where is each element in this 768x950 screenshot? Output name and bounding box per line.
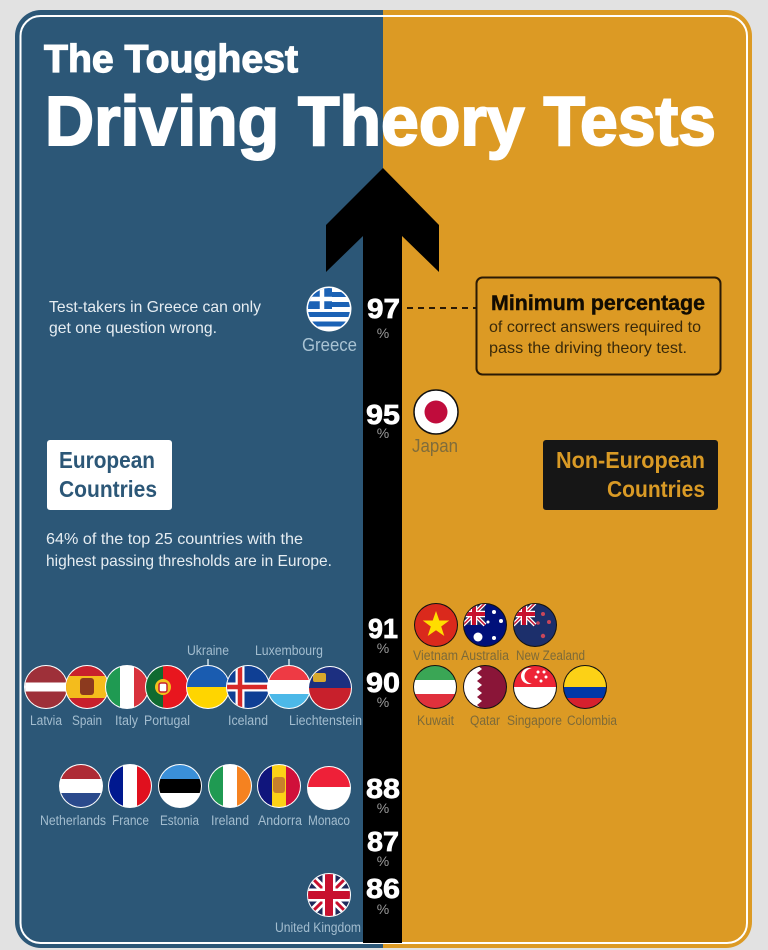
- flag: Australia: [463, 603, 507, 647]
- labels: 88 percent countries: Netherlands: [40, 813, 106, 828]
- labels: 90 percent non-European countries: Qatar: [470, 713, 500, 728]
- flag: France: [108, 764, 152, 808]
- labels: 90 percent European countries: Italy: [115, 713, 138, 728]
- flag: Ukraine: [186, 665, 230, 709]
- labels: 88 percent countries: France: [112, 813, 149, 828]
- flag: Netherlands: [59, 764, 103, 808]
- flag: New Zealand: [513, 603, 557, 647]
- labels: 88 percent countries: Estonia: [160, 813, 199, 828]
- callout: minimum percentage: [407, 278, 720, 374]
- flag: Japan: [414, 390, 458, 434]
- flag: Luxembourg: [267, 665, 311, 709]
- percentage scale: 88: [366, 773, 400, 804]
- callout: minimum percentage: of correct answers required to: [489, 319, 701, 336]
- labels: 90 percent non-European countries: Colombia: [567, 713, 617, 728]
- badge: European Countries: Countries: [59, 476, 157, 502]
- flag: Qatar: [463, 665, 507, 709]
- text: Europe share: [46, 531, 332, 570]
- percentage scale: 95: [366, 399, 400, 430]
- flag: Latvia: [24, 665, 68, 709]
- labels: 90 percent European countries: Ukraine: [187, 643, 229, 658]
- flag: Kuwait: [413, 665, 457, 709]
- text: Greece note: [49, 299, 261, 337]
- title: [44, 38, 716, 160]
- badge: European Countries: European: [59, 447, 155, 473]
- text: Europe share: 64% of the top 25 countries with the: [46, 531, 303, 548]
- title: The Toughest: [44, 38, 298, 81]
- labels: 88 percent countries: Andorra: [258, 813, 302, 828]
- percentage scale: 87: [367, 826, 399, 857]
- flag: Andorra: [257, 764, 301, 808]
- labels: 90 percent European countries: Liechtenstein: [289, 713, 362, 728]
- badge: Non-European Countries: [543, 440, 718, 510]
- percentage scale: %: [377, 425, 389, 441]
- labels: 90 percent European countries: Portugal: [144, 713, 190, 728]
- labels: 90 percent non-European countries: Singapore: [507, 713, 562, 728]
- labels: 88 percent countries: Monaco: [308, 813, 350, 828]
- title: Driving Theory Tests: [45, 82, 716, 160]
- labels: 91 percent countries: [413, 648, 585, 663]
- flag: Liechtenstein: [308, 666, 352, 710]
- labels: 90 percent European countries: Iceland: [228, 713, 268, 728]
- flag: Singapore: [513, 665, 557, 709]
- percentage scale: %: [377, 694, 389, 710]
- percentage scale: 90: [366, 667, 400, 698]
- arrow: [326, 168, 439, 943]
- flag: Spain: [65, 665, 109, 709]
- labels: 88 percent countries: Ireland: [211, 813, 249, 828]
- label: United Kingdom: United Kingdom: [275, 920, 361, 935]
- callout: minimum percentage: Minimum percentage: [491, 292, 705, 315]
- labels: 91 percent countries: Australia: [461, 648, 509, 663]
- flag: Colombia: [563, 665, 607, 709]
- flag: Ireland: [208, 764, 252, 808]
- text: Greece note: get one question wrong.: [49, 320, 217, 337]
- badge: Non-European Countries: Countries: [607, 476, 705, 502]
- labels: 90 percent European countries: Latvia: [30, 713, 62, 728]
- labels: 91 percent countries: Vietnam: [413, 648, 458, 663]
- percentage scale: 97: [367, 293, 400, 324]
- labels: 90 percent non-European countries: Kuwait: [417, 713, 454, 728]
- flag: Iceland: [226, 665, 270, 709]
- percentage scale: 91: [368, 613, 398, 644]
- labels: 88 percent countries: [40, 813, 350, 828]
- callout: minimum percentage: pass the driving theory test.: [489, 340, 687, 357]
- text: Europe share: highest passing thresholds are in Europe.: [46, 553, 332, 570]
- percentage scale: %: [377, 800, 389, 816]
- flag: United Kingdom: [307, 873, 351, 917]
- flag: Monaco: [307, 766, 351, 810]
- labels: 90 percent European countries: Spain: [72, 713, 102, 728]
- percentage scale: %: [377, 640, 389, 656]
- labels: 91 percent countries: New Zealand: [516, 648, 585, 663]
- flag: Estonia: [158, 764, 202, 808]
- labels: 90 percent non-European countries: [417, 713, 617, 728]
- percentage scale: [366, 293, 400, 917]
- labels: 90 percent European countries: Luxembourg: [255, 643, 323, 658]
- badge: Non-European Countries: Non-European: [556, 447, 705, 473]
- labels: 90 percent European countries: [30, 643, 362, 728]
- text: Greece note: Test-takers in Greece can only: [49, 299, 261, 316]
- flag: Vietnam: [414, 603, 458, 647]
- label: Greece: Greece: [302, 335, 357, 355]
- label: Japan: Japan: [412, 436, 458, 456]
- flag: Italy: [105, 665, 149, 709]
- flag: Greece: [306, 286, 352, 332]
- percentage scale: %: [377, 325, 389, 341]
- percentage scale: %: [377, 901, 389, 917]
- flag: Portugal: [145, 665, 189, 709]
- badge: European Countries: [47, 440, 172, 510]
- percentage scale: 86: [366, 873, 400, 904]
- percentage scale: %: [377, 853, 389, 869]
